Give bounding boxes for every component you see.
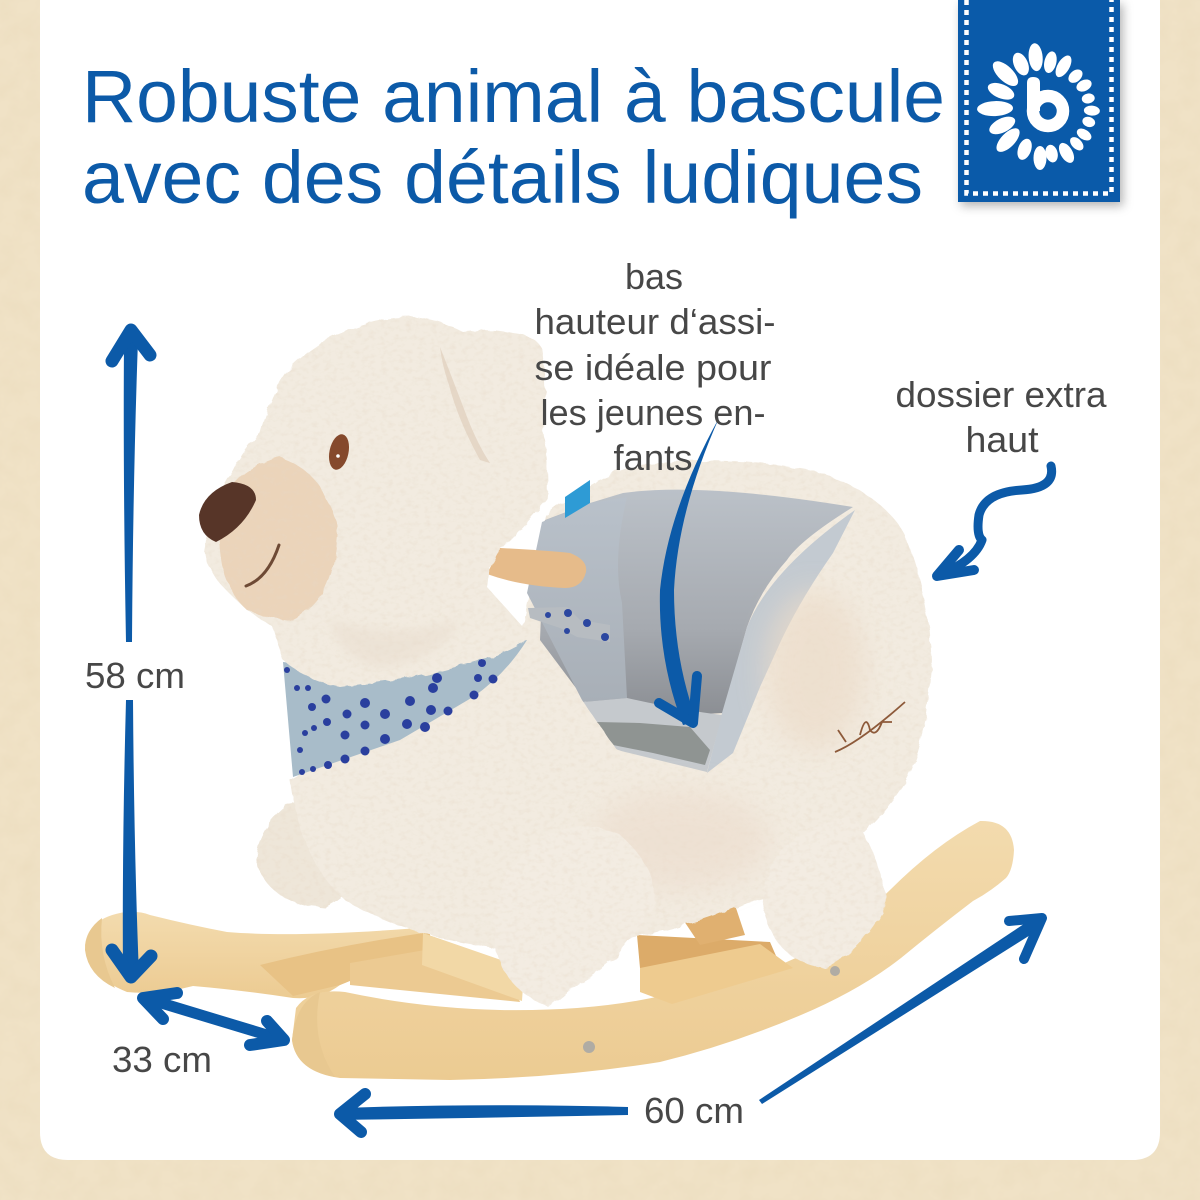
- front rocker: [292, 821, 1014, 1080]
- dimension: width: 60 cm: [644, 1090, 744, 1131]
- callout: low seat height: les jeunes en-: [540, 392, 766, 433]
- mouth: [246, 545, 279, 586]
- cheek and chin shading: [330, 620, 460, 668]
- body warm shading: [590, 790, 770, 890]
- wooden handle: [487, 548, 586, 588]
- arrow: height up: [112, 330, 150, 642]
- peach fur patch on side: [765, 590, 865, 750]
- title: avec des détails ludiques: [82, 136, 923, 219]
- ear shading: [440, 347, 490, 463]
- eye: [326, 432, 352, 472]
- title: Robuste animal à bascule: [82, 55, 945, 138]
- rocker plank block: [640, 944, 793, 1004]
- arrow: curved pointer to backrest: [937, 466, 1052, 576]
- nose: [199, 482, 256, 542]
- seat mesh: [597, 722, 710, 765]
- front body overlap: [290, 640, 775, 950]
- seat cushion: inner backrest: [540, 490, 853, 720]
- callout: low seat height: bas: [625, 256, 683, 297]
- head: [205, 317, 548, 687]
- logo: blue fabric tag with flower b: [958, 0, 1123, 206]
- back left paw: [256, 800, 360, 908]
- arrow: width 60 cm right: [759, 916, 1043, 1104]
- front paw: [494, 827, 655, 1007]
- title: [82, 55, 945, 219]
- dimension: height: 58 cm: [85, 655, 185, 696]
- seat pad: [583, 698, 722, 772]
- back rocker: [85, 912, 430, 998]
- dimension: depth: 33 cm: [112, 1039, 212, 1080]
- callout: extra high backrest: dossier extra: [896, 374, 1107, 415]
- muzzle: [219, 457, 338, 620]
- blue fabric label: [565, 480, 590, 518]
- seat strap: [528, 607, 610, 642]
- arrow: height down: [112, 700, 151, 977]
- body with high backrest: [290, 461, 932, 948]
- scarf with blue dots: [283, 640, 527, 777]
- callout: low seat height: [534, 256, 776, 478]
- cushion left wing: [527, 497, 627, 702]
- callout: low seat height: fants: [614, 437, 692, 478]
- callout: low seat height: se idéale pour: [534, 347, 772, 388]
- right rear foot: [762, 817, 887, 968]
- arrow: pointer to seat: [659, 418, 719, 725]
- embroidered signature: [835, 702, 905, 752]
- callout: low seat height: hauteur d‘assi-: [534, 301, 776, 342]
- product photo: plush bear rocking animal: [85, 317, 1014, 1080]
- arrow: width 60 cm left: [340, 1094, 628, 1132]
- callout: extra high backrest: haut: [966, 419, 1038, 460]
- wooden seat supports: [350, 905, 780, 1002]
- cushion light side band: [707, 510, 855, 773]
- rocker screws: [583, 966, 840, 1053]
- arrow: depth 33 cm: [143, 993, 284, 1045]
- callout: extra high backrest: [896, 374, 1107, 460]
